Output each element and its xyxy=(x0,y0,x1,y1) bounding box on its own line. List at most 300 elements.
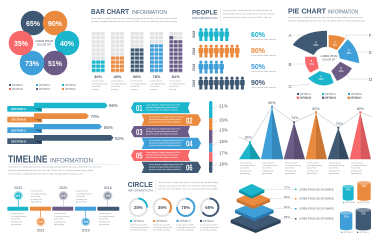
segment C: 20% xyxy=(318,78,324,81)
ribbon 03: 03 xyxy=(136,127,143,137)
donut captions xyxy=(130,220,220,232)
letter labels xyxy=(288,33,372,89)
triangle 16% xyxy=(239,142,261,159)
column 60%: is simply dummy xyxy=(131,83,147,85)
legend: OPTION E xyxy=(351,94,362,96)
circle 73%: 73% xyxy=(25,61,40,68)
donut captions: OPTION D xyxy=(203,221,214,223)
ribbon 02: ipsum has been the industry standard xyxy=(149,120,181,123)
intro text: Lorem Ipsum is simply dummy text of the printing and typesetting industry. Lorem Ipsum has been the xyxy=(8,166,102,168)
stack leaders and values: 21% xyxy=(219,103,228,108)
milestone 2022: 2022 xyxy=(14,186,22,190)
value 60%: Lorem ipsum dolor sample xyxy=(251,38,276,41)
column 78%: text of the xyxy=(150,85,160,88)
milestone 2018: 05 xyxy=(106,194,110,198)
row 2018 80%: 2018 xyxy=(192,48,196,55)
segment A xyxy=(293,31,327,55)
ribbon 01: 01 xyxy=(136,103,143,113)
value 60% xyxy=(251,32,276,41)
section A xyxy=(7,103,118,112)
stack leaders and values: 18% xyxy=(219,162,228,166)
triangle captions: typesetting xyxy=(307,172,318,175)
intro text: industry's standard dummy text ever since the 1500s when an unknown printer took xyxy=(288,19,366,22)
segment C xyxy=(308,71,334,86)
legend: OPTION E xyxy=(65,85,76,87)
triangle captions: typesetting xyxy=(240,172,251,175)
segment E: E xyxy=(348,49,350,52)
ribbon 05: ipsum has been the industry standard xyxy=(146,156,178,159)
milestone 2021 xyxy=(36,210,45,232)
triangle captions: text of the xyxy=(329,167,339,170)
layer blue xyxy=(235,202,274,221)
intro text: standard dummy text ever since the 1500s, when an xyxy=(223,16,272,19)
ribbon 05: 05 xyxy=(136,151,143,161)
letter labels: C xyxy=(288,84,292,89)
ribbon 01: ipsum has been the industry standard xyxy=(146,108,178,111)
milestone 2022: 01 xyxy=(16,194,20,198)
column 81%: 81% xyxy=(172,74,180,79)
text above 2021: text of the xyxy=(31,195,41,198)
layer rows: LOREM IPSUM DOLOR SAMPLE xyxy=(299,188,334,191)
triangle values: 89% xyxy=(268,101,276,105)
stack leaders and values: 13% xyxy=(219,128,228,132)
text above 2019: printing and xyxy=(76,198,88,201)
donut 35%: 35% xyxy=(158,205,167,210)
triangle captions: Lorem ipsum xyxy=(262,162,274,164)
segment F: F xyxy=(334,41,336,44)
column 81%: text of the xyxy=(169,85,179,88)
section B xyxy=(7,113,99,122)
text under 2020: typesetting xyxy=(54,223,65,226)
ribbon 04: 04 xyxy=(186,139,193,149)
text under 2022: printing and xyxy=(11,220,23,223)
legend: OPTION C xyxy=(39,85,50,87)
ribbon 03: Lorem Ipsum is simply dummy text of the xyxy=(146,128,180,130)
segment D xyxy=(331,62,352,81)
ribbon 01: printing and typesetting industry lorem xyxy=(146,106,178,109)
cylinder orange: OPTION B xyxy=(360,202,371,204)
panel: isometric layers xyxy=(231,184,334,233)
donut 65%: 65% xyxy=(205,205,214,210)
value 80%: Lorem ipsum dolor sample xyxy=(251,54,276,57)
section D: 92% xyxy=(115,136,124,141)
triangle values: 70% xyxy=(336,122,344,126)
text under 2018: typesetting xyxy=(99,223,110,226)
milestone 2020: 2020 xyxy=(59,186,67,190)
ribbon 06: printing and typesetting industry lorem xyxy=(149,165,181,168)
cylinder navy xyxy=(356,208,371,234)
milestone 2019: 2019 xyxy=(82,228,90,232)
text above 2021: is simply dummy xyxy=(31,193,47,195)
milestone 2022 xyxy=(14,186,23,207)
triangle values: 82% xyxy=(357,107,365,111)
legend xyxy=(297,96,361,100)
ribbon 04 xyxy=(142,138,201,149)
text under 2022: text of the xyxy=(11,218,21,221)
heading: CIRCLE xyxy=(128,180,153,189)
layer rows: LOREM IPSUM DOLOR SAMPLE xyxy=(299,208,334,211)
circle 35%: 35% xyxy=(14,41,29,48)
triangle captions: text of the xyxy=(285,167,295,170)
ribbon 06: Lorem Ipsum is simply dummy text of the xyxy=(149,164,183,166)
column 30%: text of the xyxy=(92,85,102,88)
value 60%: 60% xyxy=(251,32,266,39)
segment E: 35% xyxy=(346,52,352,55)
legend: OPTION B xyxy=(300,98,311,100)
column 78% xyxy=(150,32,166,91)
layer rows: 50% xyxy=(284,195,290,199)
donut captions: is simply dummy text xyxy=(200,226,220,229)
ribbon 02: Lorem Ipsum is simply dummy text of the xyxy=(149,116,183,118)
legend xyxy=(9,84,76,91)
panel: timeline xyxy=(7,154,119,232)
text above 2019: is simply dummy xyxy=(76,193,92,195)
milestone 2020: 03 xyxy=(61,194,65,198)
circle 40%: 40% xyxy=(60,41,75,48)
timeline bar xyxy=(7,207,119,211)
section A: 98% xyxy=(109,103,118,108)
intro text: typesetting industry. Lorem Ipsum has been the industry xyxy=(223,12,275,15)
cylinder teal xyxy=(343,185,355,204)
column 30%: 30% xyxy=(94,74,103,79)
column 81%: Lorem ipsum xyxy=(169,80,182,82)
column 81%: is simply dummy xyxy=(169,83,186,85)
heading: INFORMATION xyxy=(192,16,218,20)
row 2018 50%: 2018 xyxy=(192,64,196,71)
section C: 85% xyxy=(104,125,113,130)
letter labels: E xyxy=(369,50,372,55)
ribbon 03 xyxy=(131,126,190,137)
value 50%: Lorem ipsum dolor sample xyxy=(251,70,276,73)
circle 90%: 90% xyxy=(48,21,63,28)
column 78%: 78% xyxy=(152,74,161,79)
milestone 2019: 04 xyxy=(84,220,89,224)
letter labels: A xyxy=(288,33,292,38)
milestone 2019 xyxy=(81,210,90,232)
text above 2021: printing and xyxy=(31,198,43,201)
ribbon 04: Lorem Ipsum is simply dummy text of the xyxy=(149,140,183,142)
donut captions: Lorem ipsum dolor xyxy=(176,224,194,226)
panel: pie chart xyxy=(288,6,372,100)
heading: PIE CHART xyxy=(288,6,327,16)
heading: BAR CHART xyxy=(91,7,130,16)
legend: OPTION A xyxy=(12,84,23,87)
triangle captions: Lorem ipsum xyxy=(307,162,319,164)
legend: OPTION C xyxy=(325,94,336,96)
cylinder blue: OPTION C xyxy=(343,232,354,234)
ribbon 02: printing and typesetting industry lorem xyxy=(149,118,181,121)
donut 75%: 75% xyxy=(181,205,190,210)
triangle 82% orange xyxy=(306,112,327,159)
legend: OPTION F xyxy=(351,98,362,100)
row 2018 90%: 2018 xyxy=(192,80,196,87)
triangle captions: printing and xyxy=(351,169,363,172)
donut captions: is simply dummy text xyxy=(153,226,173,229)
segment B: B xyxy=(311,60,312,63)
text under 2020: is simply dummy xyxy=(54,216,70,218)
milestone 2020 xyxy=(59,186,68,207)
panel: people xyxy=(192,8,276,90)
pie center label: LOREM IPSUM xyxy=(321,55,337,58)
segment A: 65% xyxy=(313,44,319,47)
intro text: industry. Lorem Ipsum has been the industry's standard dummy xyxy=(158,184,217,187)
ribbon 06: ipsum has been the industry standard xyxy=(149,168,181,171)
cylinder orange: 65% xyxy=(362,185,367,188)
legend: OPTION F xyxy=(65,89,76,91)
triangle captions: printing and xyxy=(329,169,341,172)
donut captions: Lorem ipsum dolor xyxy=(130,224,147,226)
milestone 2018 xyxy=(103,186,112,207)
column 60%: 60% xyxy=(133,74,142,79)
triangle captions: is simply dummy xyxy=(262,165,278,167)
triangle 82% coral xyxy=(350,112,371,159)
column 30%: printing xyxy=(92,88,99,91)
segment F: 8% xyxy=(333,44,338,47)
trend line xyxy=(239,106,372,143)
column 81% xyxy=(169,32,186,91)
triangle captions: printing and xyxy=(262,169,274,172)
panel: bar chart xyxy=(91,7,186,91)
intro text: industry's standard dummy text ever since the 1500s, when an unknown printer took a galley xyxy=(8,169,94,172)
ribbon 04: printing and typesetting industry lorem xyxy=(149,141,181,144)
circle 51%: 51% xyxy=(48,61,63,68)
triangle values: 74% xyxy=(291,116,299,120)
triangle captions: typesetting xyxy=(351,172,362,175)
triangle captions xyxy=(240,162,367,175)
value 90%: Lorem ipsum dolor sample xyxy=(251,86,276,89)
triangle 89% xyxy=(261,107,283,159)
triangle captions: printing and xyxy=(285,169,297,172)
section D xyxy=(7,135,124,144)
column 30%: Lorem ipsum xyxy=(92,80,104,82)
triangle captions: is simply dummy xyxy=(285,165,301,167)
stack segments xyxy=(209,101,212,173)
layer teal xyxy=(239,184,264,198)
panel: triangle chart xyxy=(239,96,372,175)
layer rows: 88% xyxy=(284,215,290,219)
column 78%: is simply dummy xyxy=(150,83,166,85)
legend: OPTION D xyxy=(325,98,336,100)
layer rows: 62% xyxy=(284,205,290,209)
text above 2021: Lorem ipsum xyxy=(31,190,43,192)
legend xyxy=(297,93,362,100)
text under 2018: Lorem ipsum xyxy=(99,212,111,215)
cylinder navy: 75% xyxy=(361,212,367,216)
stack leaders and values: 15% xyxy=(219,139,228,144)
heading: INFORMATION xyxy=(328,10,358,16)
ribbon 06: 06 xyxy=(186,163,193,173)
ribbon 06 xyxy=(142,162,201,173)
value 80%: 80% xyxy=(251,48,266,55)
triangle captions: is simply dummy xyxy=(329,165,345,167)
heading xyxy=(8,154,119,165)
ribbon 04: ipsum has been the industry standard xyxy=(149,144,181,147)
intro text: text ever since the 1500s, when an unknown printer took a galley xyxy=(158,188,219,191)
cylinder blue xyxy=(340,211,354,234)
text under 2022: Lorem ipsum xyxy=(11,212,23,215)
text under 2018: text of the xyxy=(99,218,109,221)
center label: LOREM IPSUM xyxy=(35,39,53,43)
ribbon 05: Lorem Ipsum is simply dummy text of the xyxy=(146,152,180,154)
triangle captions: Lorem ipsum xyxy=(285,162,297,164)
donut 25%: 25% xyxy=(134,205,143,210)
triangle captions: Lorem ipsum xyxy=(240,162,252,164)
triangle 74% xyxy=(284,122,305,159)
ribbon 02: 02 xyxy=(186,115,193,125)
section D: SECTION D xyxy=(11,139,26,143)
column 40%: Lorem ipsum xyxy=(111,80,123,82)
layer rows xyxy=(264,186,334,221)
milestone 2021: 02 xyxy=(39,220,43,224)
value 80% xyxy=(251,48,276,57)
layer orange xyxy=(237,192,270,209)
ribbon 03: printing and typesetting industry lorem xyxy=(146,130,178,133)
letter labels: F xyxy=(369,33,372,38)
text above 2019: typesetting xyxy=(76,201,87,204)
layer navy xyxy=(231,210,281,233)
panel: circle info xyxy=(128,180,220,232)
layer rows: LOREM IPSUM DOLOR SAMPLE xyxy=(299,198,334,201)
ribbon 01 xyxy=(131,102,190,113)
text under 2018: printing and xyxy=(99,220,111,223)
heading: INFORMATION xyxy=(50,157,93,164)
text under 2020: Lorem ipsum xyxy=(54,212,66,215)
legend: OPTION B xyxy=(300,98,311,100)
panel: cylinders xyxy=(340,181,371,234)
text under 2018: is simply dummy xyxy=(99,216,115,218)
triangle values: 82% xyxy=(312,107,320,111)
layer rows: 37% xyxy=(284,186,290,190)
triangle captions: text of the xyxy=(307,167,317,170)
heading: TIMELINE xyxy=(8,154,48,165)
intro text xyxy=(91,17,178,23)
segment F xyxy=(329,35,345,50)
ribbon 05 xyxy=(131,150,190,161)
column 40%: text of the xyxy=(111,85,121,88)
triangle captions: is simply dummy xyxy=(351,165,367,167)
value 90% xyxy=(251,80,276,89)
heading xyxy=(288,6,358,16)
segment D: 15% xyxy=(338,70,344,73)
triangle captions: typesetting xyxy=(262,172,273,175)
text under 2020: printing and xyxy=(54,220,66,223)
column 81%: printing xyxy=(169,88,177,91)
triangle captions: Lorem ipsum xyxy=(351,162,363,164)
column 40%: printing xyxy=(111,88,119,91)
segment D: D xyxy=(340,67,342,70)
legend: OPTION B xyxy=(12,89,23,91)
heading: PEOPLE xyxy=(192,10,218,16)
column 78%: Lorem ipsum xyxy=(150,80,162,82)
donut captions: text of the printing xyxy=(176,229,194,232)
cylinder teal: 45% xyxy=(346,188,351,192)
column 40%: is simply dummy xyxy=(111,83,127,85)
segment C: C xyxy=(320,75,322,78)
triangle captions: typesetting xyxy=(329,172,340,175)
stack leaders and values: 17% xyxy=(219,150,228,156)
donut captions: is simply dummy text xyxy=(176,226,196,229)
section B: 70% xyxy=(90,114,99,119)
intro text: Lorem Ipsum is simply dummy text of the printing and xyxy=(223,9,273,12)
panel: stacked vertical bar xyxy=(209,101,228,173)
column 40%: 40% xyxy=(113,74,122,79)
triangle captions: text of the xyxy=(262,167,272,170)
triangle captions: Lorem ipsum xyxy=(329,162,341,164)
section A: SECTION A xyxy=(11,107,26,111)
heading xyxy=(91,7,167,16)
triangle captions: printing and xyxy=(307,169,319,172)
legend: OPTION F xyxy=(350,98,361,100)
legend: OPTION D xyxy=(325,98,336,100)
cylinder navy: OPTION D xyxy=(359,232,370,234)
section C xyxy=(7,124,113,133)
cylinder teal: OPTION A xyxy=(345,201,355,204)
intro text: Lorem Ipsum is simply dummy text of the printing and typesetting industry. Lorem xyxy=(8,172,83,175)
segment B xyxy=(305,57,319,73)
panel: numbered ribbons xyxy=(131,102,201,173)
section B: SECTION B xyxy=(11,118,26,122)
segment A: A xyxy=(315,41,317,44)
panel: six circles xyxy=(9,11,79,91)
legend: OPTION A xyxy=(300,93,311,96)
donut captions: is simply dummy text xyxy=(130,226,150,229)
triangle 70% xyxy=(328,128,349,159)
column 78%: printing xyxy=(150,88,158,91)
section C: SECTION C xyxy=(11,128,26,132)
column 60%: Lorem ipsum xyxy=(131,80,143,82)
circle 65%: 65% xyxy=(26,21,41,28)
center label: DOLOR SIT xyxy=(37,43,51,47)
column 60% xyxy=(131,32,147,91)
legend: OPTION D xyxy=(39,89,50,91)
triangle values xyxy=(244,101,365,139)
heading: INFORMATION xyxy=(128,188,153,192)
donut captions: Lorem ipsum dolor xyxy=(200,224,217,226)
triangle captions: typesetting xyxy=(285,172,296,175)
pie center label: DOLOR SIT xyxy=(323,58,336,61)
layer rows: LOREM IPSUM DOLOR SAMPLE xyxy=(299,218,334,221)
letter labels: B xyxy=(288,62,292,67)
ribbon 01: Lorem Ipsum is simply dummy text of the xyxy=(146,104,180,106)
triangle captions: text of the xyxy=(351,167,361,170)
triangle captions: text of the xyxy=(240,167,250,170)
text under 2022: is simply dummy xyxy=(11,216,27,218)
heading xyxy=(192,8,220,21)
text above 2019: text of the xyxy=(76,195,86,198)
ribbon 05: printing and typesetting industry lorem xyxy=(146,154,178,157)
segment E xyxy=(338,39,359,63)
value 90%: 90% xyxy=(251,80,266,87)
heading: INFORMATION xyxy=(132,10,167,16)
column 40% xyxy=(111,32,127,91)
text under 2020: text of the xyxy=(54,218,64,221)
text above 2019: Lorem ipsum xyxy=(76,190,88,192)
donut captions: Lorem ipsum dolor xyxy=(153,224,170,226)
intro text: Lorem Ipsum is simply dummy text of the printing and typesetting industry. Lorem xyxy=(288,16,363,19)
intro text: industry's standard dummy text ever since the 1500s, when an unknown printer took a galley xyxy=(91,20,178,23)
letter labels: D xyxy=(369,77,372,82)
stack leaders and values xyxy=(211,103,228,167)
donut captions: OPTION A xyxy=(133,220,144,223)
column 30% xyxy=(92,32,108,91)
intro text: Lorem Ipsum is simply dummy text of the printing and typesetting xyxy=(158,181,219,184)
column 60%: printing xyxy=(131,88,138,91)
leader lines xyxy=(292,35,368,86)
text above 2021: typesetting xyxy=(31,201,42,204)
value 50%: 50% xyxy=(251,64,266,71)
column 60%: text of the xyxy=(131,85,141,88)
milestone 2021: 2021 xyxy=(37,228,45,232)
